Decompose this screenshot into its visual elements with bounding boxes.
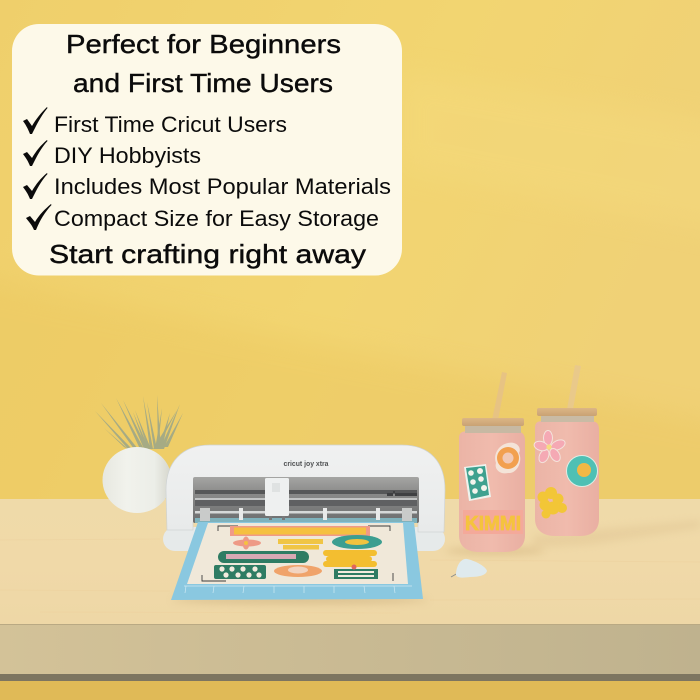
registration marks bbox=[202, 526, 393, 581]
checklist item 1: First Time Cricut Users bbox=[54, 112, 287, 137]
sticker: daisies bbox=[464, 464, 491, 501]
closing line: Start crafting right away bbox=[49, 239, 366, 269]
sticker: yellow blob bbox=[538, 487, 567, 518]
cutting machine bbox=[163, 445, 445, 600]
machine body bbox=[166, 445, 445, 532]
glass jar with stickers: back bbox=[533, 365, 599, 536]
cutting slot bbox=[193, 477, 419, 523]
sticker: KIMMI word: KIMMI bbox=[465, 513, 521, 535]
glass neck bbox=[465, 426, 521, 433]
wall background bbox=[0, 0, 700, 560]
heading: and First Time Users bbox=[73, 68, 333, 98]
sticker: pink flower bbox=[533, 430, 567, 464]
weeding tool bbox=[451, 559, 487, 578]
stickers on sheet bbox=[214, 526, 382, 579]
sticker: orange flower bbox=[495, 443, 520, 473]
sticker: KIMMI bbox=[230, 526, 370, 536]
sticker sheet bbox=[187, 523, 408, 584]
bamboo lid bbox=[462, 418, 524, 426]
straw bbox=[492, 372, 507, 420]
jar body bbox=[535, 421, 599, 536]
sticker: teal badge bbox=[566, 456, 598, 486]
machine base wings bbox=[163, 527, 445, 551]
straw bbox=[567, 365, 581, 409]
sticker: daisies bbox=[214, 565, 266, 579]
sticker: yellow text bbox=[278, 539, 323, 550]
sticker: orange flower bbox=[274, 565, 322, 577]
sticker: teal badge bbox=[332, 535, 382, 549]
checklist item 4: Compact Size for Easy Storage bbox=[54, 206, 379, 231]
tool carriage bbox=[265, 478, 289, 520]
heading: Perfect for Beginners bbox=[66, 29, 341, 59]
brand label: cricut joy xtra bbox=[284, 459, 329, 468]
bamboo lid bbox=[537, 408, 597, 416]
shadows on table bbox=[172, 520, 700, 604]
checklist item 2: DIY Hobbyists bbox=[54, 143, 201, 168]
heading bbox=[66, 29, 341, 98]
sticker: green text bbox=[218, 551, 309, 563]
checklist item 3: Includes Most Popular Materials bbox=[54, 174, 391, 199]
sticker: yellow blob bbox=[323, 550, 377, 567]
sticker: green with cherry bbox=[334, 564, 378, 579]
wooden table bbox=[0, 499, 700, 700]
mat grid ticks bbox=[184, 586, 412, 593]
glass neck bbox=[541, 416, 594, 422]
jar body bbox=[459, 431, 525, 552]
plant in white pot bbox=[95, 395, 183, 513]
cutting mat bbox=[171, 522, 423, 600]
glass jar with stickers: front bbox=[459, 372, 525, 552]
sticker: pink flower bbox=[233, 536, 261, 550]
info panel bbox=[12, 24, 402, 276]
